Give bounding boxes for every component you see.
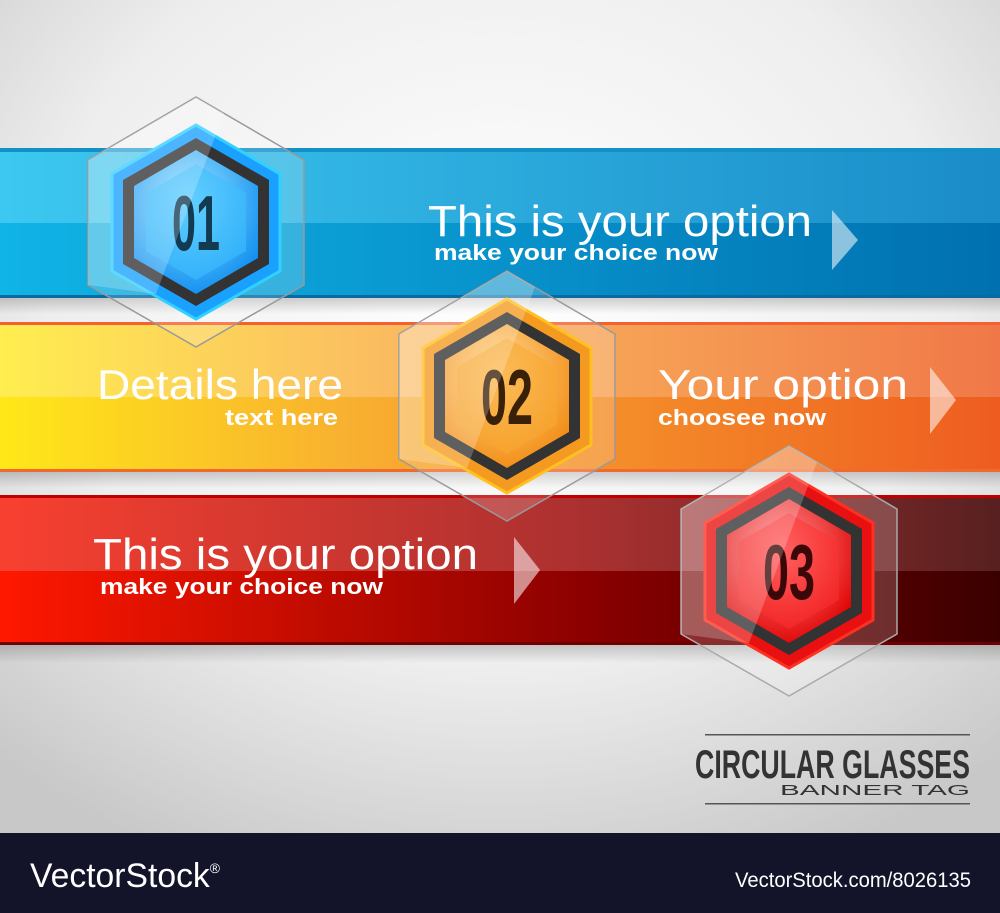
text: blue band option xyxy=(428,197,812,265)
footer xyxy=(0,833,1000,913)
text: orange band details xyxy=(97,361,343,430)
title tag: circular glasses xyxy=(695,734,970,804)
badge: 02 xyxy=(399,271,615,521)
footer: VectorStock xyxy=(30,857,211,895)
arrow: blue xyxy=(832,210,858,270)
footer: VectorStock.com/8026135 xyxy=(735,869,971,892)
text: orange band details: text here xyxy=(225,405,338,430)
text: red band option xyxy=(93,530,478,599)
text: red band option: make your choice now xyxy=(100,574,384,599)
badge: 02: 02 xyxy=(481,353,533,441)
footer: ® xyxy=(210,860,221,876)
band: orange xyxy=(0,322,1000,488)
badge: 03 xyxy=(681,446,897,696)
badge: 03: 03 xyxy=(763,528,815,616)
text: orange band details: Details here xyxy=(97,361,343,408)
badge: 01: 01 xyxy=(172,179,220,267)
badge: 01 xyxy=(88,97,304,347)
text: orange band option: choosee now xyxy=(658,405,827,430)
text: orange band option xyxy=(658,361,908,430)
text: orange band option: Your option xyxy=(658,361,908,408)
arrow: orange xyxy=(930,367,956,434)
text: red band option: This is your option xyxy=(93,530,478,579)
title tag: circular glasses: BANNER TAG xyxy=(780,782,970,799)
arrow: red xyxy=(514,537,540,604)
band: red xyxy=(0,495,1000,663)
text: blue band option: This is your option xyxy=(428,197,812,246)
text: blue band option: make your choice now xyxy=(434,240,719,265)
band: blue xyxy=(0,148,1000,314)
